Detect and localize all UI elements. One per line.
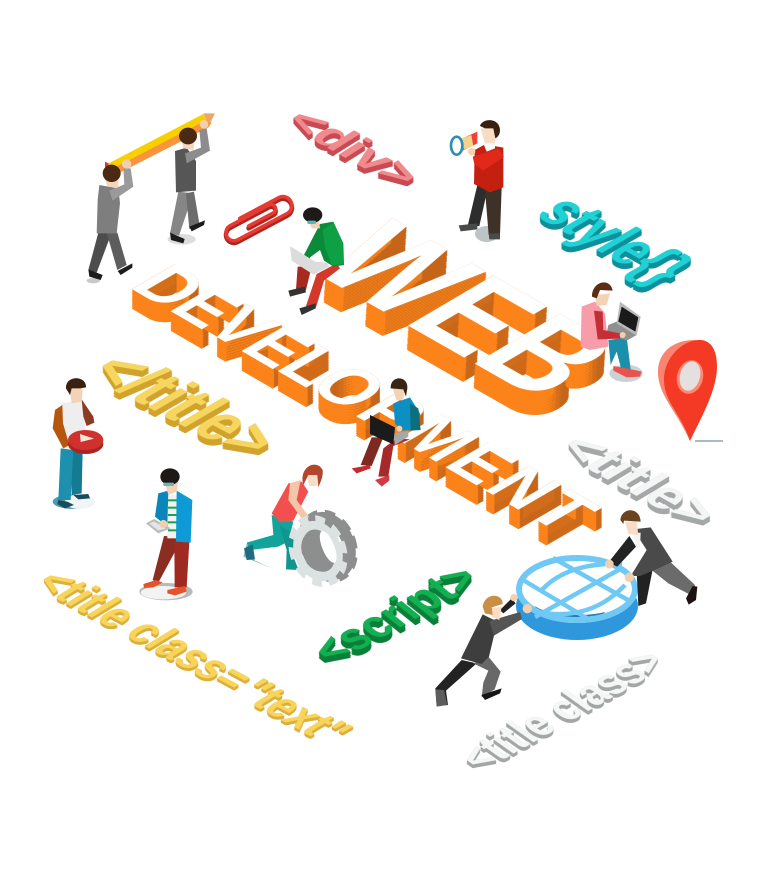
icon: red map pin [658,340,723,442]
icon: megaphone [451,132,477,155]
icon: pencil [105,113,215,176]
label: script tag: <script> [299,556,490,671]
icon: blue globe [516,555,638,640]
figure: man with glasses in blue jacket holding tablet [139,468,193,600]
icon: paperclip [221,193,296,246]
figure: businessman pushing globe from top right [605,510,697,606]
figure: businessman pushing globe from bottom left [435,594,532,707]
label: title class text in gold: <title class= "text" [23,563,364,751]
figure: man with megaphone in red sweater [451,120,504,242]
label: style braces: style{} [522,186,710,292]
figure: man in green hoodie with laptop [288,207,344,315]
figure: man with blue shirt and black laptop [352,378,421,487]
icon: gear [282,506,364,591]
label: closing title tag in yellow: </title> [72,342,301,467]
heading: WEB 3D word: WEB [280,202,652,417]
icon: red play disc [68,430,103,454]
figure: woman turning a gear [243,465,323,570]
heading: DEVELOPMENT 3D word: DEVELOPMENT [115,252,615,544]
label: div tag: <div> [273,102,434,193]
figure: two men carrying a pencil [87,113,215,283]
figure: man in pink shirt with laptop [581,282,643,382]
label: title tag in grey: <title> [545,426,733,534]
label: title class in silver: <title class> [447,641,677,778]
figure: man with play button [53,378,103,509]
